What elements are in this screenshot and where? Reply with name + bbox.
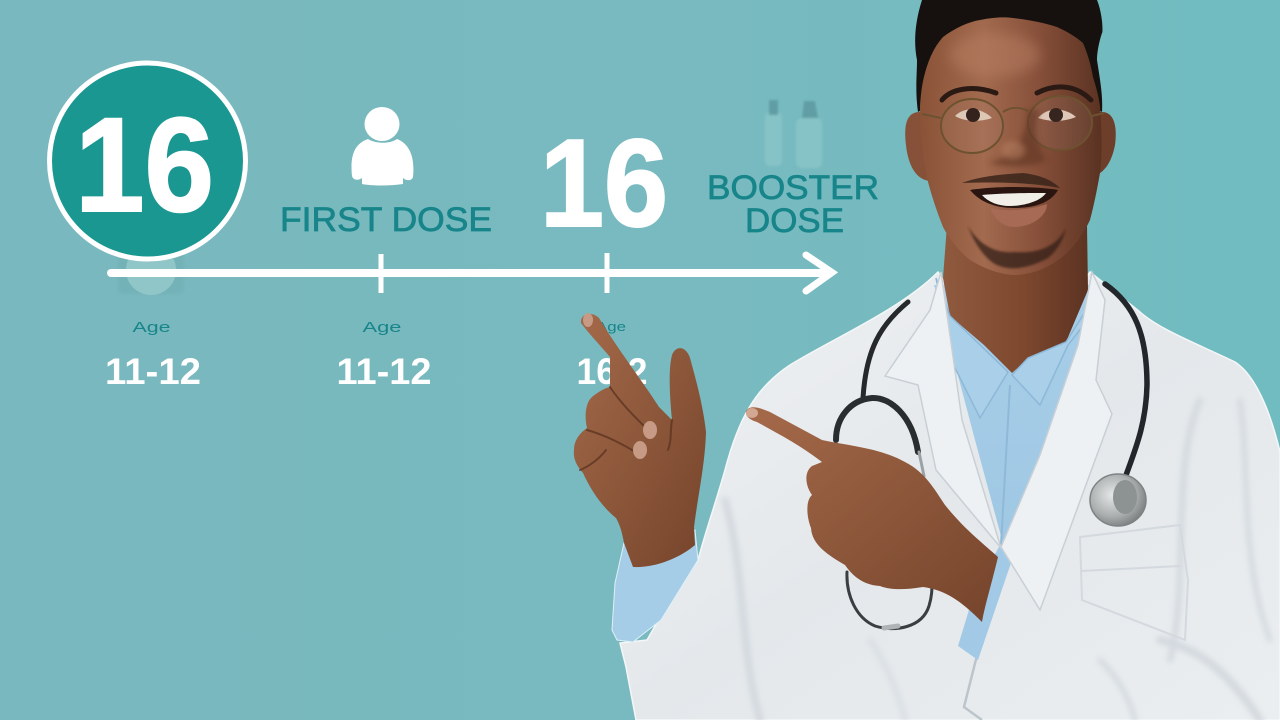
age label 1 bbox=[105, 319, 201, 392]
fingernails bbox=[583, 313, 657, 459]
shirt bbox=[934, 285, 1092, 660]
finger creases bbox=[580, 387, 672, 470]
age label 3: 16-2 bbox=[576, 351, 648, 392]
age label 2 bbox=[336, 319, 432, 392]
age label 2: 11-12 bbox=[336, 351, 432, 392]
age label 1: Age bbox=[132, 319, 170, 336]
coat lapels bbox=[885, 272, 1112, 610]
lab coat bbox=[620, 272, 1280, 720]
badge: 16 in teal circle bbox=[50, 63, 246, 259]
heading: booster dose bbox=[707, 169, 879, 240]
badge: 16 in teal circle: 16 bbox=[75, 91, 214, 240]
coat pocket bbox=[1080, 525, 1188, 640]
neck bbox=[943, 225, 1088, 373]
moustache bbox=[962, 173, 1060, 188]
age label 3: Age bbox=[596, 319, 626, 334]
eyebrows bbox=[942, 87, 1091, 100]
hair bbox=[915, 0, 1102, 112]
coat fold shading bbox=[725, 400, 1270, 720]
pointing hand bbox=[746, 407, 998, 622]
face bbox=[920, 17, 1102, 275]
timeline arrow bbox=[107, 245, 832, 295]
stethoscope lower loop bbox=[847, 572, 932, 629]
mouth bbox=[970, 187, 1058, 227]
stethoscope upper loop bbox=[836, 398, 918, 452]
raised hand bbox=[574, 313, 706, 567]
eyes bbox=[955, 108, 1076, 122]
pointing fingernail bbox=[746, 408, 758, 418]
heading: first dose: FIRST DOSE bbox=[280, 201, 492, 239]
raised hand shirt cuff bbox=[612, 530, 698, 642]
heading: booster dose: DOSE bbox=[745, 202, 844, 240]
coat front edge bbox=[964, 556, 1002, 720]
number: second 16: 16 bbox=[540, 115, 668, 253]
stethoscope left tube bbox=[863, 302, 908, 398]
age label 2: Age bbox=[362, 319, 402, 336]
age label 1: 11-12 bbox=[105, 351, 201, 392]
icon: faded vaccine bottles bbox=[765, 100, 822, 168]
stethoscope chest piece bbox=[1090, 474, 1146, 526]
doctor photo illustration bbox=[574, 0, 1280, 720]
head bbox=[905, 0, 1116, 275]
icon: person bbox=[352, 107, 413, 186]
ghost marker on timeline start bbox=[118, 245, 184, 295]
nose bbox=[988, 110, 1046, 166]
stethoscope bbox=[836, 284, 1147, 629]
shirt collar bbox=[936, 272, 1094, 418]
age label 3 bbox=[576, 319, 648, 392]
stethoscope right tube bbox=[1105, 284, 1147, 478]
ears bbox=[905, 112, 1116, 181]
glasses bbox=[922, 96, 1104, 153]
forehead highlight bbox=[950, 33, 1040, 77]
heading: booster dose: BOOSTER bbox=[707, 169, 879, 207]
beard shadow bbox=[968, 226, 1066, 268]
